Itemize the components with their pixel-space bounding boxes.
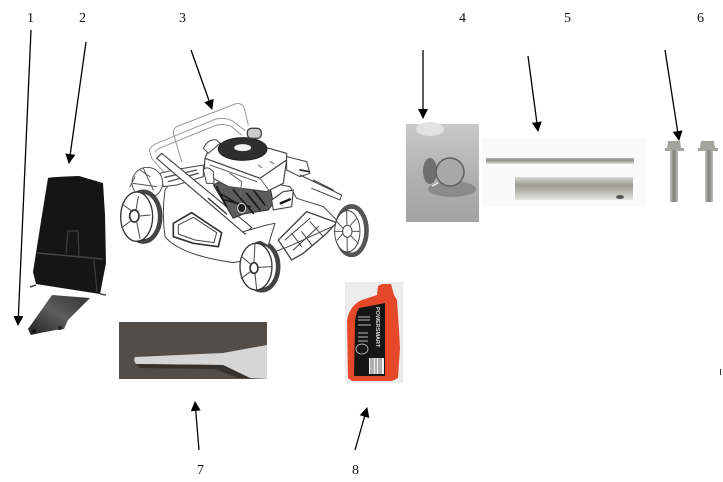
number labels: 5 — [564, 11, 571, 26]
mower rear frame — [160, 165, 203, 187]
number labels: 6 — [697, 11, 704, 26]
icon: funnel photo — [119, 322, 267, 379]
number labels: 3 — [179, 11, 186, 26]
number labels: 7 — [197, 463, 204, 478]
icon: oil bottle: POWERSMART — [374, 307, 380, 348]
mower deck — [163, 170, 340, 263]
icon: spark plug wrench and rod — [482, 138, 646, 207]
arrows — [18, 30, 679, 450]
mower handle — [149, 104, 248, 173]
number labels: 2 — [79, 11, 86, 26]
mower engine — [213, 177, 273, 218]
page edge tick — [720, 369, 722, 375]
icon: bolts — [665, 141, 718, 202]
mower push bar — [157, 153, 252, 234]
icon: grass bag — [30, 176, 106, 295]
number labels: 1 — [27, 11, 34, 26]
icon: oil bottle — [345, 282, 403, 383]
mower wheels — [121, 167, 368, 292]
icon: clip photo — [406, 122, 479, 222]
number labels: 4 — [459, 11, 466, 26]
number labels: 8 — [352, 463, 359, 478]
icon: lawn mower line drawing — [121, 104, 368, 292]
icon: mulch plug — [28, 295, 90, 335]
